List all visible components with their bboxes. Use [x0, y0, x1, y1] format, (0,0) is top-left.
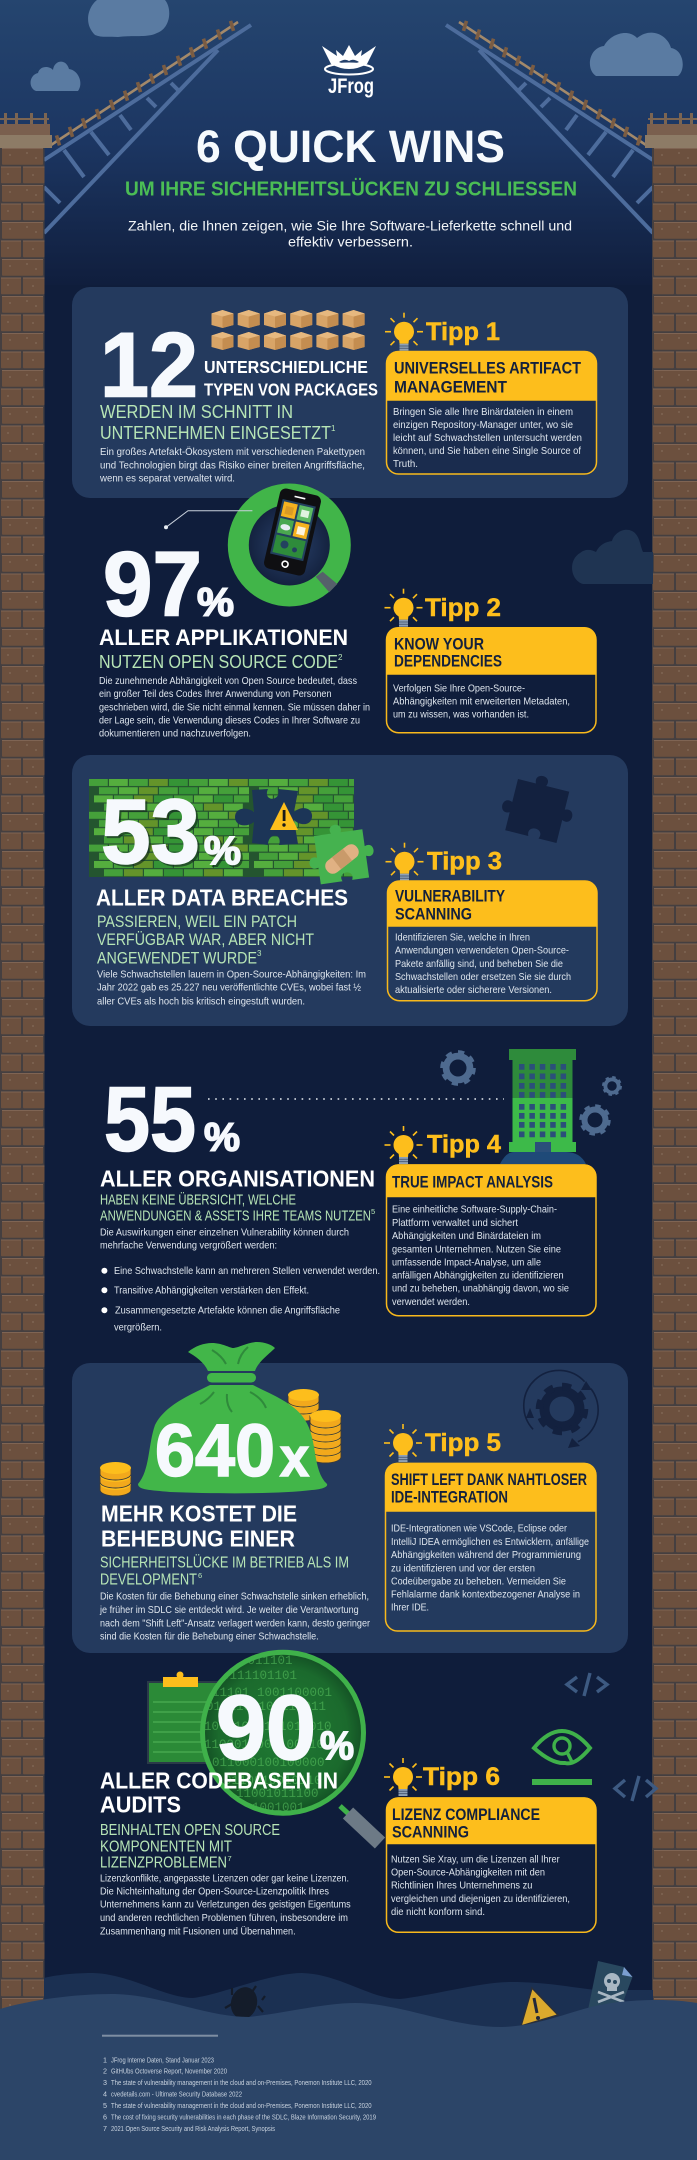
footnotes: JFrog Interne Daten, Stand Januar 2023: [111, 2055, 214, 2064]
heading: [101, 1501, 297, 1552]
icon: eye with magnifier: [532, 1731, 592, 1785]
subheading: 2: [338, 653, 343, 662]
brick tower right: [645, 113, 697, 2013]
footnotes: 2: [103, 2067, 107, 2076]
body text: [100, 1226, 349, 1251]
subheading: NUTZEN OPEN SOURCE CODE: [99, 651, 338, 672]
number 53%: %: [204, 829, 241, 873]
body text: Lizenzkonflikte, angepasste Lizenzen oder gar keine Lizenzen.: [100, 1873, 349, 1885]
body text: der Lage sein, die Verwendung dieses Codes in Ihrer Software zu: [99, 715, 360, 727]
subheading: [100, 1822, 280, 1872]
footnotes: 4: [103, 2090, 107, 2099]
tip 6: [384, 1758, 596, 1932]
tip label: Tipp 1: [426, 318, 500, 346]
card: Bringen Sie alle Ihre Binärdateien in einem: [393, 406, 573, 418]
card: Pakete anfällig sind, und beheben Sie die: [395, 958, 563, 970]
card: KNOW YOUR: [394, 635, 484, 653]
footnotes: The cost of fixing security vulnerabilities in each phase of the SDLC, Blaze Information Security, 2019: [111, 2112, 376, 2121]
body text: [100, 1873, 351, 1937]
bullet list: [101, 1265, 380, 1333]
footnotes: 6: [103, 2112, 107, 2121]
icon: gear with cycle arrows: [518, 1364, 603, 1450]
card: Abhängigkeiten mit erweiterten Metadaten,: [393, 695, 570, 707]
card: einzigen Repository-Manager unter, wo sie: [393, 419, 573, 431]
card: TRUE IMPACT ANALYSIS: [392, 1173, 553, 1191]
number 640x: x: [280, 1426, 309, 1488]
body text: [99, 675, 370, 740]
icon: building: [500, 1049, 586, 1164]
tip 5: [384, 1424, 596, 1631]
card: UNIVERSELLES ARTIFACT: [394, 358, 582, 377]
tip 3: [386, 843, 598, 1001]
body text: wenn es separat verwaltet wird.: [99, 472, 235, 484]
heading: AUDITS: [100, 1791, 181, 1817]
card: Verfolgen Sie Ihre Open-Source-: [393, 682, 525, 694]
tip label: Tipp 6: [423, 1763, 500, 1791]
card: Richtlinien Ihres Unternehmens zu: [391, 1880, 533, 1892]
card: umfassende Impact-Analyse, um alle: [392, 1256, 541, 1268]
card: [386, 627, 596, 733]
body text: ein großer Teil des Codes Ihrer Anwendung von Personen: [99, 688, 332, 700]
tip label: Tipp 2: [425, 594, 501, 622]
number 55%: %: [204, 1116, 240, 1160]
icon: bug: [225, 1984, 265, 2022]
subtitle: UM IHRE SICHERHEITSLÜCKEN ZU SCHLIESSEN: [125, 178, 577, 201]
tip 4: [384, 1126, 596, 1316]
card: Schwachstellen oder ersetzen Sie sie durch: [395, 971, 571, 983]
body text: geschrieben wird, die Sie nicht einmal kennen. Sie müssen daher in: [99, 701, 370, 713]
logo: JFrog: JFrog: [328, 75, 374, 98]
section 3: data breaches statistic: [89, 779, 377, 1007]
card: IDE-Integrationen wie VSCode, Eclipse oder: [391, 1523, 567, 1535]
card: die nicht konform sind.: [391, 1906, 485, 1918]
card: [386, 1164, 596, 1316]
subheading: 1: [331, 424, 336, 433]
heading: [204, 357, 378, 400]
subheading: [100, 1191, 375, 1224]
icon: phone in magnifier ring: [238, 487, 340, 596]
body text: dokumentieren und nachzuverfolgen.: [99, 728, 251, 740]
body text: Die Nichteinhaltung der Open-Source-Lizenzpolitik Ihres: [100, 1886, 329, 1898]
body text: Ein großes Artefakt-Ökosystem mit verschiedenen Pakettypen: [100, 446, 365, 458]
subheading: 6: [198, 1571, 202, 1580]
number 640x: 640: [155, 1409, 275, 1492]
section 2: applications statistic: [99, 487, 370, 740]
icon: magnifying glass with binary code: 0111101101: [222, 1669, 297, 1683]
tip label: Tipp 4: [427, 1131, 501, 1159]
bullet list: vergrößern.: [114, 1321, 162, 1333]
intro text: Zahlen, die Ihnen zeigen, wie Sie Ihre Software-Lieferkette schnell und: [128, 219, 572, 234]
card: und zu beheben, unabhängig davon, wo sie: [392, 1283, 569, 1295]
card: leicht auf Schwachstellen untersucht werden: [393, 432, 582, 444]
number 53%: 53: [101, 781, 200, 883]
icon: cloud right: [572, 530, 653, 584]
card: LIZENZ COMPLIANCE: [392, 1806, 540, 1824]
body text: Viele Schwachstellen lauern in Open-Source-Abhängigkeiten: Im: [97, 968, 366, 980]
tip label: Tipp 5: [425, 1429, 501, 1457]
icon: magnifying glass with binary code: 0011101: [240, 1654, 293, 1668]
card: können, und Sie haben eine Single Source of: [393, 445, 581, 457]
footnotes: 1: [103, 2055, 107, 2064]
card: Ihrer IDE.: [391, 1602, 429, 1614]
subheading: LIZENZPROBLEMEN: [100, 1855, 227, 1872]
card: Plattform verwaltet und sichert: [392, 1217, 518, 1229]
icon: light bulb: [384, 1424, 422, 1462]
title: 6 QUICK WINS: [196, 121, 505, 172]
icon: code tags: [567, 1673, 656, 1801]
icon: magnifying glass with binary code: 11001011100: [236, 1787, 319, 1801]
body text: Jahr 2022 gab es 25.227 neu veröffentlichte CVEs, wobei fast ½: [97, 982, 361, 994]
card: anfälligen Abhängigkeiten zu identifizieren: [392, 1269, 564, 1281]
card: DEPENDENCIES: [394, 653, 502, 671]
bullet list: Eine Schwachstelle kann an mehreren Stellen verwendet werden.: [114, 1265, 380, 1277]
body text: [99, 1591, 370, 1642]
number 55%: 55: [104, 1069, 196, 1171]
section 4: organisations statistic: [100, 1069, 380, 1333]
brick tower left: [0, 113, 52, 2013]
heading: ALLER DATA BREACHES: [96, 885, 348, 911]
icon: coin stacks: [100, 1389, 341, 1496]
section 1: packages statistic: [99, 310, 378, 484]
body text: Unternehmens kann zu Verletzungen des geistigen Eigentums: [100, 1899, 351, 1911]
panel: background tip 1: [72, 287, 628, 498]
icon: dark puzzle piece: [497, 768, 580, 845]
subheading: PASSIEREN, WEIL EIN PATCH: [97, 912, 297, 931]
footnote rule: [102, 2035, 218, 2037]
card: Nutzen Sie Xray, um die Lizenzen all Ihrer: [391, 1853, 560, 1865]
card: Open-Source-Abhängigkeiten mit den: [391, 1866, 545, 1878]
icon: clipboard: [148, 1672, 218, 1763]
card: gesamten Unternehmen. Nutzen Sie eine: [392, 1243, 561, 1255]
icon: magnifying glass with binary code: [202, 1652, 380, 1843]
body text: Die Auswirkungen einer einzelnen Vulnerability können durch: [100, 1226, 349, 1238]
number 90%: %: [320, 1724, 354, 1768]
icon: magnifying glass with binary code: 011000100100000: [212, 1756, 325, 1770]
back wave: [44, 1973, 653, 2040]
icon: package boxes: [212, 310, 365, 350]
footnotes: 3: [103, 2078, 107, 2087]
subheading: VERFÜGBAR WAR, ABER NICHT: [97, 930, 314, 949]
icon: magnifying glass with binary code: 1001001: [252, 1801, 305, 1815]
panel: background tip 5: [72, 1363, 628, 1653]
section 6: codebases statistic: [100, 1652, 380, 1937]
icon: magnifying glass with binary code: 10011011101011010: [204, 1720, 332, 1734]
subheading: ANGEWENDET WURDE: [97, 948, 257, 967]
intro text: [128, 219, 572, 250]
logo: JFrog: [322, 45, 376, 98]
footnotes: The state of vulnerability management in the cloud and on-Premises, Ponemon Institute LLC, 2020: [111, 2078, 372, 2087]
icon: magnifying glass with binary code: 0101100100110011: [206, 1700, 326, 1714]
bridge right: [446, 21, 653, 233]
body text: und Technologien birgt das Risiko einer breiten Angriffsfläche,: [100, 459, 365, 471]
icon: clouds in sky: [31, 0, 683, 91]
body text: und anderen rechtlichen Problemen führen, insbesondere im: [100, 1912, 348, 1924]
connector line: [164, 511, 252, 529]
icon: light bulb: [385, 313, 423, 351]
heading: UNTERSCHIEDLICHE: [204, 357, 368, 377]
card: IDE-INTEGRATION: [391, 1489, 508, 1507]
card: [387, 881, 598, 1001]
subheading: 7: [228, 1854, 232, 1863]
icon: light bulb: [384, 589, 422, 627]
card: SHIFT LEFT DANK NAHTLOSER: [391, 1471, 587, 1489]
card: Fehlalarme dank kontextbezogener Analyse in: [391, 1589, 580, 1601]
card: IntelliJ IDEA ermöglichen es Entwicklern, anfällige: [391, 1536, 589, 1548]
subheading: 3: [257, 949, 262, 958]
bullet list: Zusammengesetzte Artefakte können die Angriffsfläche: [115, 1305, 340, 1317]
footnotes: 5: [103, 2101, 107, 2110]
icon: gears: [443, 1053, 621, 1134]
body text: nach dem "Shift Left"-Ansatz verlagert werden kann, desto geringer: [100, 1617, 370, 1629]
card: Abhängigkeiten und Binärdateien im: [392, 1230, 541, 1242]
icon: light bulb: [386, 843, 424, 881]
card: SCANNING: [392, 1823, 469, 1841]
front wave: [0, 1994, 697, 2160]
body text: Die Kosten für die Behebung einer Schwachstelle sinken erheblich,: [100, 1591, 369, 1603]
icon: magnifying glass with binary code: 1100010001100110: [204, 1738, 324, 1752]
icon: light bulb: [384, 1126, 422, 1164]
bullet list: Transitive Abhängigkeiten verstärken den Effekt.: [114, 1285, 309, 1297]
heading: ALLER ORGANISATIONEN: [100, 1166, 375, 1192]
footnotes: [103, 2055, 376, 2133]
heading: TYPEN VON PACKAGES: [204, 380, 378, 400]
icon: light bulb: [384, 1758, 422, 1796]
body text: [97, 968, 366, 1007]
intro text: effektiv verbessern.: [288, 235, 413, 250]
subheading: KOMPONENTEN MIT: [100, 1838, 232, 1855]
icon: skull document: [588, 1961, 632, 2010]
subheading: ANWENDUNGEN & ASSETS IHRE TEAMS NUTZEN: [100, 1208, 371, 1224]
icon: magnifying glass with binary code: 11101 1001100001: [212, 1686, 332, 1700]
subheading: [100, 1553, 349, 1588]
body text: je früher im SDLC sie entdeckt wird. Je weiter die Verantwortung: [99, 1604, 359, 1616]
card: VULNERABILITY: [395, 888, 505, 906]
icon: dark puzzle hole with warning: [235, 789, 312, 845]
body text: Die zunehmende Abhängigkeit von Open Source bedeutet, dass: [99, 675, 357, 687]
body text: sind die Kosten für die Behebung einer Schwachstelle.: [100, 1630, 319, 1642]
subheading: DEVELOPMENT: [100, 1571, 197, 1588]
heading: ALLER APPLIKATIONEN: [99, 625, 348, 650]
tip 1: [385, 313, 597, 474]
card: [386, 351, 597, 474]
subheading: [100, 401, 336, 443]
icon: warning triangle: [521, 1988, 558, 2026]
card: [385, 1463, 596, 1631]
card: Eine einheitliche Software-Supply-Chain-: [392, 1204, 557, 1216]
card: um zu wissen, was vorhanden ist.: [393, 709, 529, 721]
subheading: UNTERNEHMEN EINGESETZT: [100, 422, 331, 443]
card: SCANNING: [395, 905, 472, 923]
subheading: HABEN KEINE ÜBERSICHT, WELCHE: [100, 1191, 296, 1209]
card: [386, 1797, 596, 1932]
subheading: WERDEN IM SCHNITT IN: [100, 401, 293, 422]
number 97%: 97: [103, 534, 202, 636]
subheading: 5: [371, 1207, 375, 1216]
card: Anwendungen verwendeten Open-Source-: [395, 945, 569, 957]
number 90%: 90: [216, 1677, 316, 1779]
number 12: 12: [100, 315, 198, 417]
icon: magnifying glass with binary code: 0110010010110: [224, 1774, 322, 1788]
card: verwendet werden.: [392, 1296, 470, 1308]
card: Identifizieren Sie, welche in Ihren: [395, 932, 530, 944]
heading: [100, 1767, 338, 1817]
bridge left: [44, 21, 251, 233]
tip 2: [384, 589, 596, 733]
card: vergleichen und diejenigen zu identifizieren,: [391, 1893, 570, 1905]
card: Codeübergabe zu beheben. Vermeiden Sie: [391, 1575, 566, 1587]
subheading: [97, 912, 314, 967]
card: Truth.: [393, 458, 418, 470]
heading: ALLER CODEBASEN IN: [100, 1767, 338, 1793]
body text: [99, 446, 365, 484]
footnotes: 2021 Open Source Security and Risk Analysis Report, Synopsis: [111, 2124, 275, 2133]
number 97%: %: [197, 581, 234, 625]
heading: MEHR KOSTET DIE: [101, 1501, 297, 1527]
icon: money bag: [138, 1342, 327, 1493]
card: Abhängigkeiten während der Programmierung: [391, 1549, 581, 1561]
dotted connector: [208, 1098, 504, 1100]
subheading: SICHERHEITSLÜCKE IM BETRIEB ALS IM: [100, 1553, 349, 1571]
body text: mehrfache Verwendung vergrößert werden:: [100, 1239, 277, 1251]
icon: green puzzle with bandage: [305, 820, 377, 885]
panel: background tip 3: [72, 755, 628, 1026]
card: aktualisierte oder sicherere Versionen.: [395, 984, 552, 996]
heading: BEHEBUNG EINER: [101, 1526, 295, 1552]
section 5: cost statistic: [99, 1342, 370, 1642]
icon: green brick wall: [89, 779, 354, 877]
footnotes: 7: [103, 2124, 107, 2133]
card: MANAGEMENT: [394, 378, 508, 397]
body text: Zusammenhang mit Fusionen und Übernahmen.: [100, 1925, 296, 1937]
tip label: Tipp 3: [427, 847, 502, 875]
subheading: BEINHALTEN OPEN SOURCE: [100, 1822, 280, 1839]
footnotes: cvedetails.com - Ultimate Security Database 2022: [111, 2090, 242, 2099]
footnotes: The state of vulnerability management in the cloud and on-Premises, Ponemon Institute LLC, 2020: [111, 2101, 372, 2110]
footnotes: GitHUbs Octoverse Report, November 2020: [111, 2067, 227, 2076]
card: zu identifizieren und vor der ersten: [391, 1562, 535, 1574]
body text: aller CVEs als hoch bis kritisch eingestuft wurden.: [97, 995, 305, 1007]
